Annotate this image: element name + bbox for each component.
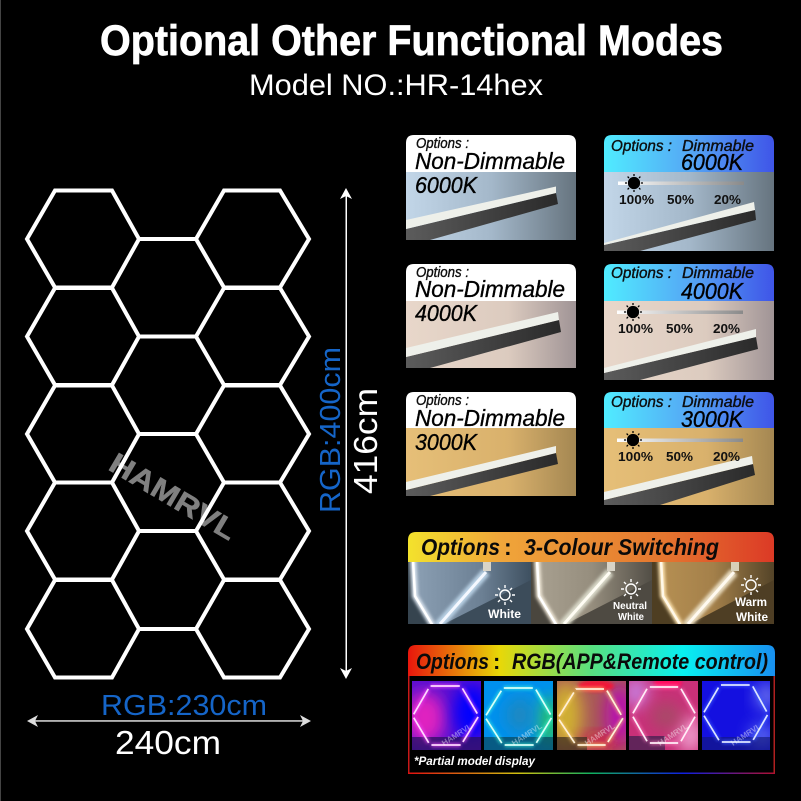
panel: non-dimmable 4000K xyxy=(406,264,576,368)
watermark: HAMRVL xyxy=(103,447,242,547)
panel: 3-colour switching xyxy=(408,532,774,626)
footnote: *Partial model display xyxy=(414,754,536,768)
panel: RGB options: : xyxy=(493,649,500,674)
panel: non-dimmable 6000K: 6000K xyxy=(415,172,479,198)
hexagon layout diagram xyxy=(27,190,309,678)
panel: non-dimmable 6000K xyxy=(406,135,576,240)
label: RGB height: RGB:400cm xyxy=(315,347,347,513)
panel: RGB options xyxy=(405,645,776,774)
photo: blue RGB hexagon: HAMRVL xyxy=(729,722,763,748)
icon: brightness sun xyxy=(624,303,642,321)
panel: dimmable 6000K: Options : xyxy=(611,138,672,155)
panel: dimmable 4000K: 4000K xyxy=(681,278,745,304)
panel: dimmable 6000K: 100% xyxy=(619,192,654,207)
photo: purple RGB hexagon xyxy=(412,681,481,750)
panel: dimmable 4000K: Dimmable xyxy=(682,265,754,282)
icon: neutral sun xyxy=(621,579,641,599)
panel: 3-colour switching: : xyxy=(504,534,512,560)
photo: cyan RGB hexagon xyxy=(484,681,553,750)
panel: dimmable 4000K: 100% xyxy=(618,321,653,336)
panel: dimmable 3000K: 20% xyxy=(713,449,740,464)
title: Optional Other Functional Modes xyxy=(100,17,723,65)
photo: warm white xyxy=(652,560,774,626)
panel: 3-colour switching: White xyxy=(618,611,644,623)
subtitle: model number: Model NO.:HR-14hex xyxy=(249,69,543,102)
panel: dimmable 3000K: Dimmable xyxy=(682,394,754,411)
photo: purple RGB hexagon: HAMRVL xyxy=(440,722,474,748)
panel: dimmable 6000K: 6000K xyxy=(681,149,745,175)
panel: dimmable 3000K xyxy=(604,392,774,505)
panel: dimmable 4000K: Options : xyxy=(611,265,672,282)
photo: yellow-magenta RGB hexagon xyxy=(557,681,626,750)
icon: warm sun xyxy=(741,575,761,595)
label: RGB width: RGB:230cm xyxy=(101,690,267,722)
arrow: width dimension xyxy=(27,715,311,727)
panel: dimmable 6000K xyxy=(604,135,774,251)
photo: blue RGB hexagon xyxy=(702,681,776,750)
photo: neutral white xyxy=(531,560,652,626)
panel: non-dimmable 3000K xyxy=(406,392,576,496)
panel: non-dimmable 3000K: 3000K xyxy=(415,429,479,455)
photo: white xyxy=(408,560,531,626)
arrow: height dimension xyxy=(340,188,352,679)
panel: non-dimmable 6000K: Options : xyxy=(416,135,469,152)
photo: yellow-magenta RGB hexagon: HAMRVL xyxy=(583,722,617,748)
panel: dimmable 3000K: Options : xyxy=(611,394,672,411)
panel: non-dimmable 3000K: Non-Dimmable xyxy=(415,405,565,431)
panel: dimmable 6000K: 20% xyxy=(714,192,741,207)
icon: brightness sun xyxy=(625,174,643,192)
panel: non-dimmable 4000K: 4000K xyxy=(415,300,479,326)
photo: pink RGB hexagon xyxy=(629,681,698,750)
panel: dimmable 4000K: 50% xyxy=(666,321,693,336)
panel: non-dimmable 4000K: Options : xyxy=(416,264,469,281)
panel: dimmable 3000K: 50% xyxy=(666,449,693,464)
label: overall width: 240cm xyxy=(115,724,221,761)
icon: white sun xyxy=(495,585,515,605)
panel: 3-colour switching: 3-Colour Switching xyxy=(524,534,719,560)
panel: dimmable 3000K: 100% xyxy=(618,449,653,464)
panel: dimmable 4000K xyxy=(604,264,774,380)
panel: 3-colour switching: Neutral xyxy=(613,600,647,612)
panel: 3-colour switching: White xyxy=(488,607,521,621)
panel: RGB options: RGB(APP&Remote control) xyxy=(512,649,768,674)
panel: 3-colour switching: Options xyxy=(421,534,500,560)
photo: cyan RGB hexagon: HAMRVL xyxy=(510,722,544,748)
panel: dimmable 4000K: 20% xyxy=(713,321,740,336)
panel: dimmable 3000K: 3000K xyxy=(681,406,745,432)
panel: non-dimmable 6000K: Non-Dimmable xyxy=(415,148,565,174)
panel: dimmable 6000K: Dimmable xyxy=(682,138,754,155)
photo: pink RGB hexagon: HAMRVL xyxy=(656,722,690,748)
panel: dimmable 6000K: 50% xyxy=(667,192,694,207)
label: overall height: 416cm xyxy=(347,388,384,494)
icon: brightness sun xyxy=(624,431,642,449)
panel: non-dimmable 3000K: Options : xyxy=(416,392,469,409)
panel: RGB options: Options xyxy=(416,649,489,674)
panel: 3-colour switching: White xyxy=(736,610,768,624)
panel: 3-colour switching: Warm xyxy=(735,595,767,609)
panel: non-dimmable 4000K: Non-Dimmable xyxy=(415,276,565,302)
